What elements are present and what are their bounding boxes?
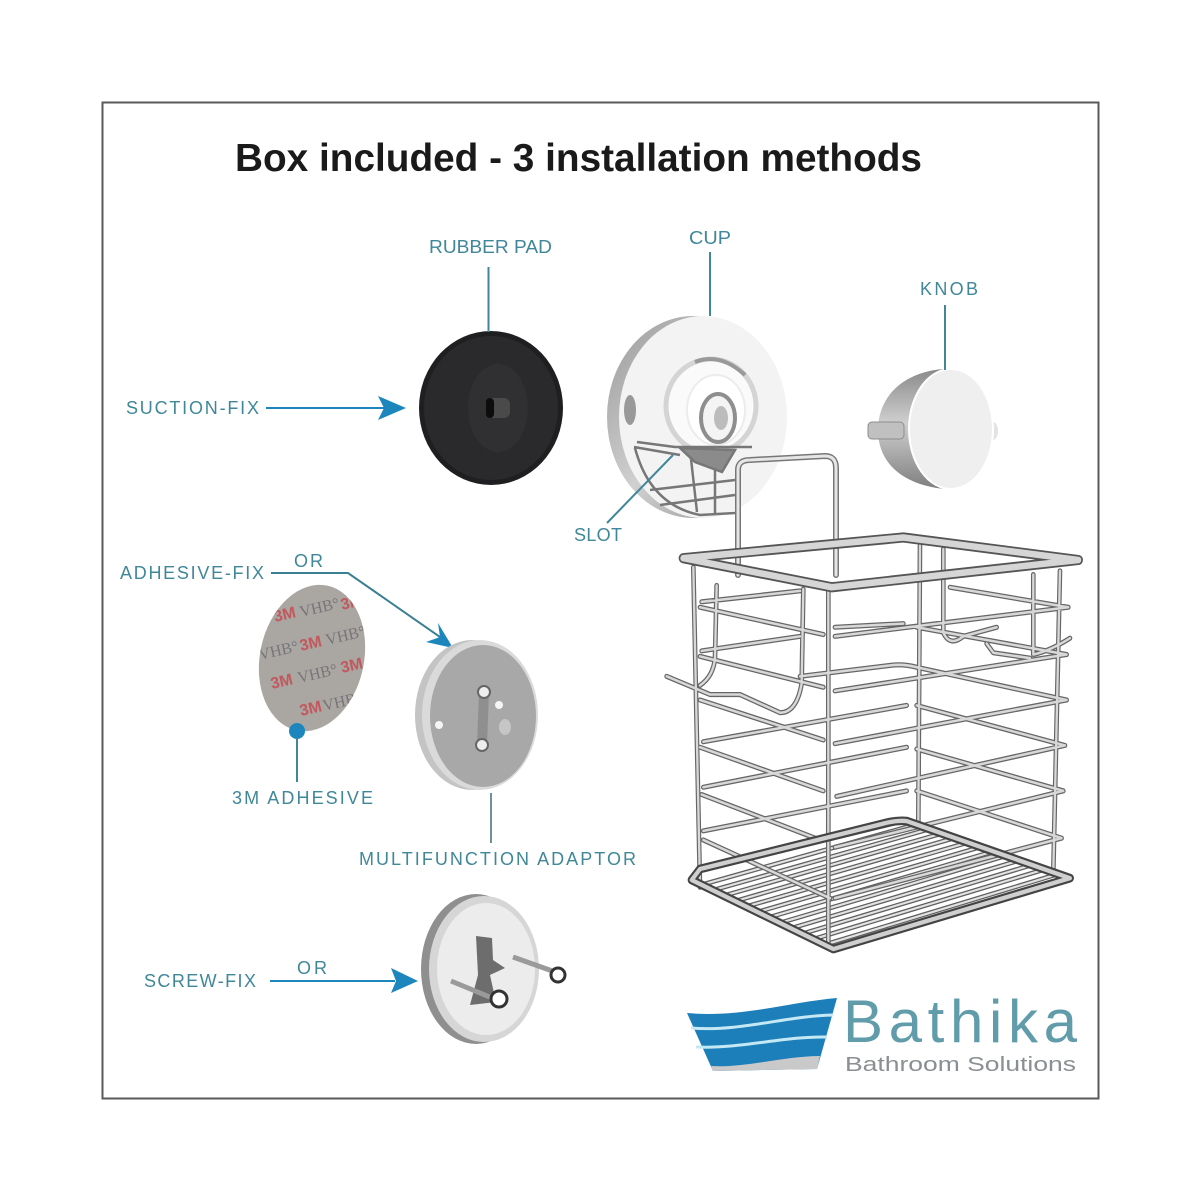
- label: screw-fix: SCREW-FIX: [144, 971, 256, 991]
- label: cup: [689, 228, 731, 316]
- basket floor frame: [692, 821, 1070, 949]
- label: slot: SLOT: [574, 525, 622, 545]
- icon: 3M adhesive disc: VHB°: [324, 623, 367, 649]
- icon: suction cup: [607, 316, 787, 518]
- icon: 3M adhesive disc: 3M: [339, 592, 365, 614]
- basket top rim: [683, 537, 1078, 587]
- label: 3M adhesive: 3M ADHESIVE: [232, 788, 373, 808]
- infographic canvas: [102, 102, 1100, 1100]
- arrow: suction-fix: [266, 396, 406, 420]
- icon: rubber pad: [419, 331, 563, 485]
- panel border: [102, 102, 1098, 1098]
- label: adhesive-fix: ADHESIVE-FIX: [120, 563, 264, 583]
- icon: 3M adhesive disc: 3M: [339, 655, 365, 677]
- icon: screw fix adaptor: [421, 894, 565, 1044]
- logo wordmark: Bathika: [843, 988, 1078, 1055]
- icon: 3M adhesive disc: 3M: [298, 698, 324, 720]
- label: suction-fix: SUCTION-FIX: [126, 398, 259, 418]
- label: slot: [574, 455, 673, 545]
- icon: 3M adhesive disc: 3M: [272, 604, 298, 626]
- icon: 3M adhesive disc: 3M: [269, 671, 295, 693]
- label: cup: CUP: [689, 228, 731, 248]
- cup inner ring: [666, 359, 756, 453]
- icon: 3M adhesive disc: [258, 584, 366, 732]
- logo tagline: Bathroom Solutions: [845, 1054, 1076, 1076]
- cup slot and wire seen through: [634, 442, 752, 515]
- basket wires: [667, 545, 1070, 945]
- wire basket: [667, 537, 1078, 949]
- label: knob: KNOB: [920, 279, 978, 299]
- label: knob: [920, 279, 978, 370]
- icon: 3M adhesive disc: VHB°: [321, 689, 364, 715]
- logo mark: [687, 998, 837, 1071]
- label: multifunction adaptor: MULTIFUNCTION ADAPTOR: [359, 849, 636, 869]
- icon: 3M adhesive disc: VHB°: [296, 661, 339, 687]
- cup side detail: [624, 395, 636, 425]
- icon: 3M adhesive disc: VHB°: [257, 638, 300, 664]
- label: 3M adhesive: [232, 723, 373, 808]
- icon: 3M adhesive disc: 3M: [298, 633, 324, 655]
- arrow: adhesive-fix: [271, 573, 453, 648]
- cup centre hole: [701, 394, 735, 442]
- basket floor slats: [699, 824, 1059, 945]
- label: rubber pad: [429, 237, 552, 332]
- icon: multifunction adaptor: [415, 640, 538, 790]
- hanger wire frame: [738, 456, 836, 575]
- logo: Bathika: [687, 988, 1078, 1076]
- label: rubber pad: RUBBER PAD: [429, 237, 552, 257]
- label: or (screw): OR: [297, 958, 327, 978]
- label: or (adhesive): OR: [294, 551, 323, 571]
- arrow: screw-fix: [270, 968, 418, 993]
- title: Box included - 3 installation methods: [235, 137, 922, 180]
- icon: 3M adhesive disc: VHB°: [298, 595, 341, 621]
- icon: knob: [868, 369, 998, 489]
